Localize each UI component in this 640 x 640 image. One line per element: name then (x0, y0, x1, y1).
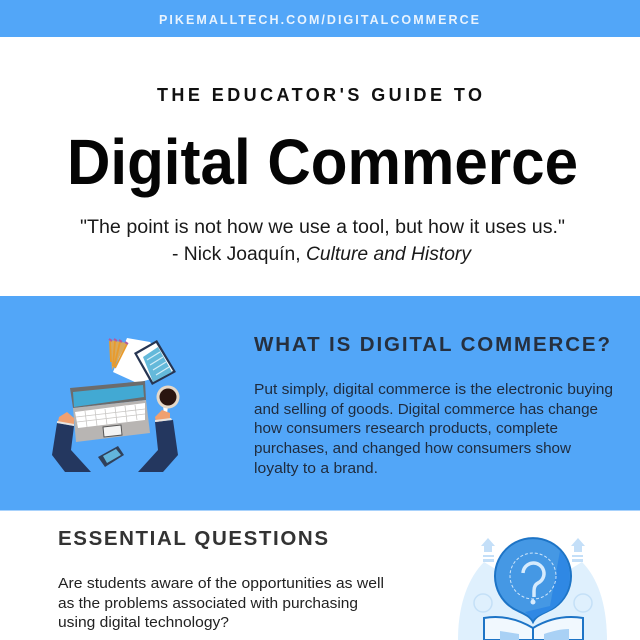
subtitle: THE EDUCATOR'S GUIDE TO (157, 85, 482, 105)
essential questions text: Are students aware of the opportunities as well (58, 576, 384, 592)
heading: essential questions: ESSENTIAL QUESTIONS (58, 527, 328, 550)
section body (254, 382, 613, 477)
essential questions text: using digital technology? (58, 615, 229, 631)
section heading: WHAT IS DIGITAL COMMERCE? (254, 333, 610, 356)
section body: loyalty to a brand. (254, 461, 378, 477)
icon: book with question bubble (458, 538, 607, 640)
section body: Put simply, digital commerce is the electronic buying (254, 382, 613, 398)
panel: what is digital commerce (0, 296, 640, 510)
section body: purchases, and changed how consumers show (254, 441, 572, 457)
essential questions text (58, 576, 384, 631)
icon: laptop workspace (52, 338, 180, 472)
section body: and selling of goods. Digital commerce has change (254, 402, 598, 418)
quote: "The point is not how we use a tool, but how it uses us." (80, 217, 565, 238)
essential questions text: as the problems associated with purchasing (58, 596, 358, 612)
title: Digital Commerce (67, 126, 578, 198)
top banner: PIKEMALLTECH.COM/DIGITALCOMMERCE (159, 13, 479, 27)
top banner (0, 0, 640, 37)
section body: how consumers research products, complete (254, 421, 558, 437)
quote: - Nick Joaquín, Culture and History (172, 244, 473, 265)
quote (80, 217, 565, 265)
